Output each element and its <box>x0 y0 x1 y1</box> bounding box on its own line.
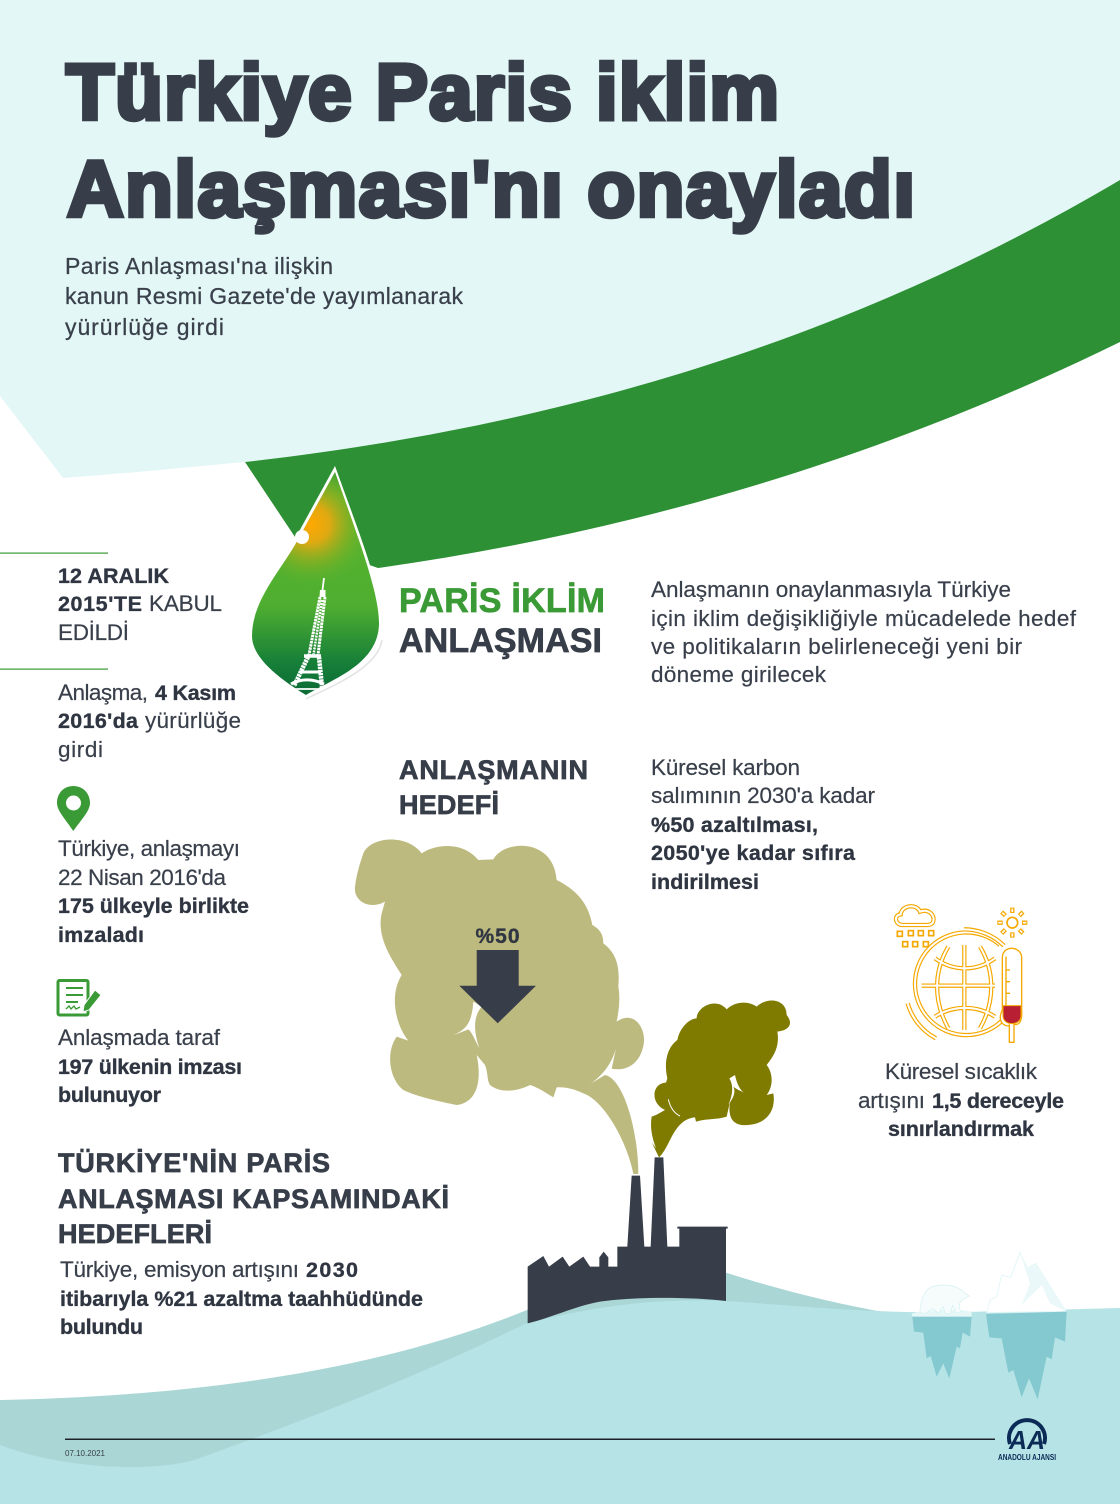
text block: adoption date: 2015'TE <box>58 592 142 616</box>
text block: temperature target: artışını <box>858 1088 925 1113</box>
illustration: factory silhouette <box>528 1157 728 1323</box>
text block: temperature target: Küresel sıcaklık <box>885 1059 1038 1084</box>
text block: parties <box>58 1025 242 1107</box>
text block: new era: için iklim değişikliğiyle mücadelede hedef <box>651 606 1077 631</box>
text block: signing: imzaladı <box>58 923 144 947</box>
text block: Türkiye's commitment: Türkiye, emisyon artışını <box>60 1257 299 1282</box>
arrow: downward reduction <box>459 950 536 1023</box>
title: Türkiye Paris iklim <box>66 48 779 136</box>
icon: signed document <box>58 980 101 1015</box>
logo: Anadolu Ajansı: ANADOLU AJANSI <box>998 1453 1056 1462</box>
subtitle <box>65 253 464 340</box>
text block: adoption date: 12 ARALIK <box>58 564 169 588</box>
text block: entry into force: Anlaşma, <box>58 680 148 705</box>
icon: globe, weather and thermometer <box>896 906 1027 1042</box>
logo: Anadolu Ajansı <box>998 1420 1056 1462</box>
logo: Anadolu Ajansı: AA <box>1008 1425 1045 1455</box>
text block: Türkiye's commitment: bulundu <box>60 1315 143 1339</box>
text block: carbon target: indirilmesi <box>651 870 759 894</box>
text block: parties: bulunuyor <box>58 1083 162 1107</box>
text block: adoption date: KABUL <box>149 591 222 616</box>
text block: new era: ve politikaların belirleneceği yeni bir <box>651 634 1022 659</box>
subtitle: yürürlüğe girdi <box>65 314 224 340</box>
heading: Paris Climate Agreement: PARİS İKLİM <box>399 582 605 620</box>
illustration: dark smoke cloud <box>651 1000 790 1157</box>
text block: signing: 175 ülkeyle birlikte <box>58 894 249 918</box>
text block: entry into force: girdi <box>58 737 103 762</box>
text block: adoption date: EDİLDİ <box>58 620 129 645</box>
text block: signing: 22 Nisan 2016'da <box>58 865 226 890</box>
text block: temperature target <box>858 1059 1064 1141</box>
subtitle: Paris Anlaşması'na ilişkin <box>65 253 333 279</box>
label: %50: %50 <box>476 925 520 948</box>
text block: temperature target: 1,5 dereceyle <box>932 1089 1064 1113</box>
footer rule <box>65 1438 995 1440</box>
text block: adoption date <box>58 564 222 645</box>
text block: carbon target <box>651 755 876 894</box>
text block: parties: Anlaşmada taraf <box>58 1025 221 1050</box>
icon: location pin <box>57 786 90 831</box>
text block: new era <box>651 577 1077 687</box>
background: light teal sea <box>0 1300 1120 1504</box>
illustration: polar bear on iceberg <box>912 1285 972 1378</box>
illustration: light smoke cloud <box>355 840 644 1174</box>
illustration: iceberg <box>986 1253 1067 1399</box>
heading: Türkiye's targets <box>58 1148 449 1249</box>
heading: Türkiye's targets: TÜRKİYE'NİN PARİS <box>58 1148 330 1178</box>
text block: new era: Anlaşmanın onaylanmasıyla Türkiye <box>651 577 1011 602</box>
text block: carbon target: Küresel karbon <box>651 755 800 780</box>
green rule bottom <box>0 668 108 670</box>
heading: Türkiye's targets: HEDEFLERİ <box>58 1219 212 1249</box>
text block: new era: döneme girilecek <box>651 662 827 687</box>
text block: carbon target: %50 azaltılması, <box>651 813 818 837</box>
heading: goal of the agreement: ANLAŞMANIN <box>399 755 588 785</box>
background: dark teal hill wave <box>0 1273 900 1504</box>
text block: Türkiye's commitment <box>60 1257 423 1339</box>
background: light cyan top panel <box>0 0 1120 478</box>
green rule top <box>0 552 108 554</box>
text block: carbon target: 2050'ye kadar sıfıra <box>651 841 856 865</box>
heading: Paris Climate Agreement: ANLAŞMASI <box>399 622 602 660</box>
text block: entry into force: yürürlüğe <box>145 708 241 733</box>
subtitle: kanun Resmi Gazete'de yayımlanarak <box>65 283 464 309</box>
title <box>66 48 915 233</box>
heading: goal of the agreement: HEDEFİ <box>399 790 499 820</box>
text block: temperature target: sınırlandırmak <box>888 1117 1034 1141</box>
green ribbon <box>245 180 1120 568</box>
date: 07.10.2021 <box>65 1449 106 1458</box>
text block: signing: Türkiye, anlaşmayı <box>58 836 240 861</box>
heading: Türkiye's targets: ANLAŞMASI KAPSAMINDAKİ <box>58 1184 449 1214</box>
text block: entry into force: 2016'da <box>58 709 139 733</box>
heading: Paris Climate Agreement <box>399 582 605 660</box>
text block: carbon target: salımının 2030'a kadar <box>651 783 876 808</box>
text block: entry into force <box>58 680 241 762</box>
title: Anlaşması'nı onayladı <box>67 145 915 233</box>
text block: signing <box>58 836 249 947</box>
text block: entry into force: 4 Kasım <box>155 681 236 705</box>
text block: parties: 197 ülkenin imzası <box>58 1055 242 1079</box>
heading: goal of the agreement <box>399 755 588 820</box>
icon: Paris climate drop with Eiffel tower <box>249 466 382 699</box>
text block: Türkiye's commitment: 2030 <box>306 1258 358 1282</box>
text block: Türkiye's commitment: itibarıyla %21 azaltma taahhüdünde <box>60 1287 423 1311</box>
